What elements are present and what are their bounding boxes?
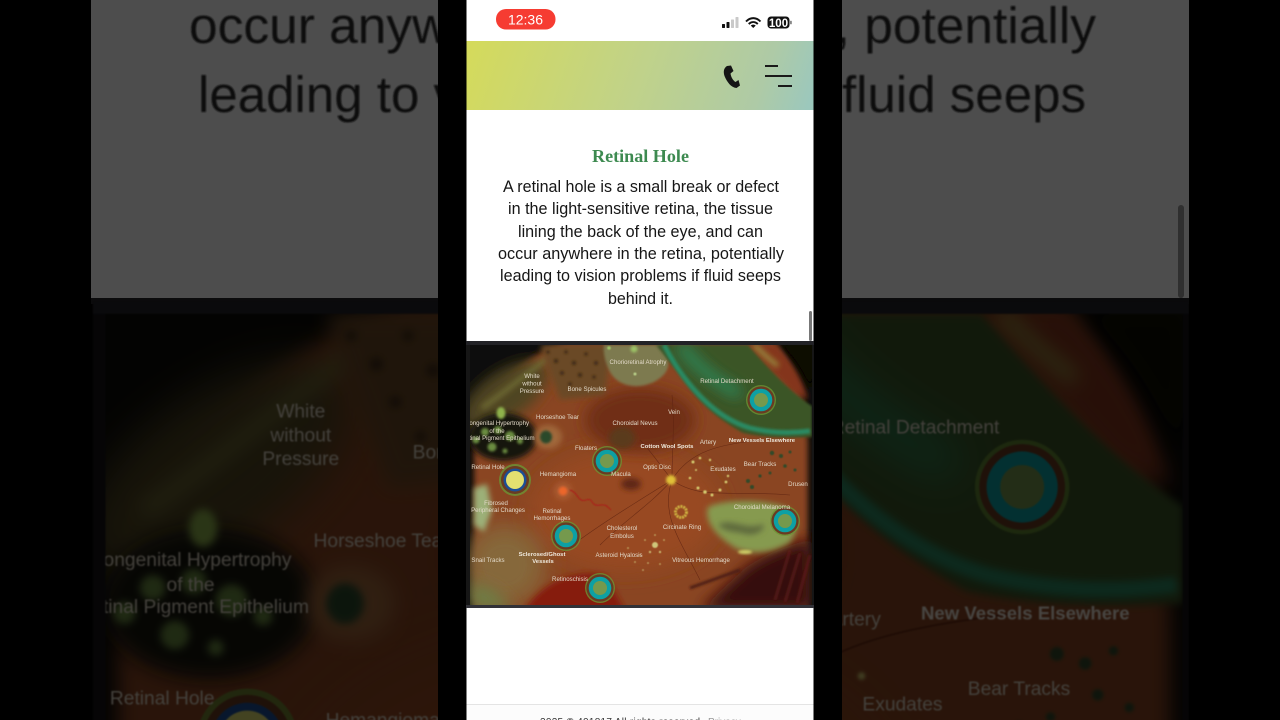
labels: retinal conditions: Macula	[611, 471, 631, 478]
icon: signal bars	[722, 17, 738, 28]
header band	[466, 41, 814, 110]
text block: description: A retinal hole is a small break or defect	[503, 178, 779, 196]
labels: retinal conditions: Peripheral Changes	[471, 507, 525, 514]
labels: retinal conditions: Snail Tracks	[471, 557, 505, 564]
panel: left enlarged backdrop: Pressure	[262, 449, 339, 470]
labels: retinal conditions: Retinal	[543, 508, 561, 515]
labels: retinal conditions: Horseshoe Tear	[536, 414, 579, 421]
labels: retinal conditions: Bone Spicules	[568, 386, 606, 393]
labels: retinal conditions: Retinal Detachment	[700, 378, 754, 385]
icon: menu	[765, 66, 792, 86]
footer	[466, 704, 814, 720]
labels: retinal conditions	[461, 359, 808, 583]
labels: retinal conditions: Artery	[700, 439, 717, 446]
labels: retinal conditions: Bear Tracks	[744, 461, 776, 468]
labels: retinal conditions: Sclerosed/Ghost	[519, 552, 565, 558]
labels: retinal conditions: Hemangioma	[540, 471, 577, 478]
markers: pulsing hotspots	[499, 385, 800, 603]
labels: retinal conditions: Floaters	[575, 445, 597, 452]
labels: retinal conditions: Fibrosed	[484, 500, 508, 507]
text block: description	[498, 178, 785, 308]
labels: retinal conditions: Pressure	[520, 388, 545, 395]
panel: right enlarged backdrop: Exudates	[862, 695, 942, 716]
icon: battery: 100	[769, 18, 788, 30]
labels: retinal conditions: Embolus	[610, 533, 634, 540]
labels: retinal conditions: Retinal Hole	[471, 464, 505, 471]
text block: description: behind it.	[608, 290, 673, 308]
labels: retinal conditions: Congenital Hypertrophy	[465, 420, 530, 427]
labels: retinal conditions: Retinal Pigment Epithelium	[461, 435, 535, 442]
labels: retinal conditions: Cholesterol	[607, 525, 637, 532]
panel: left enlarged backdrop: Retinal Hole	[110, 688, 215, 709]
labels: retinal conditions: White	[524, 373, 540, 380]
text block: description: leading to vision problems if fluid seeps	[500, 267, 781, 285]
labels: retinal conditions: Retinoschisis	[552, 576, 588, 583]
panel: right enlarged backdrop: Bear Tracks	[968, 679, 1070, 700]
text block: description: lining the back of the eye, and can	[518, 223, 763, 241]
labels: retinal conditions: Hemorrhages	[534, 515, 570, 522]
heading: Retinal Hole	[592, 146, 689, 166]
time pill	[496, 9, 556, 30]
panel: right enlarged backdrop	[842, 0, 1189, 720]
labels: retinal conditions: Circinate Ring	[663, 524, 701, 531]
text block: description: occur anywhere in the retina, potentially	[498, 245, 785, 263]
text block: description: in the light-sensitive retina, the tissue	[508, 200, 773, 218]
labels: retinal conditions: Choroidal Melanoma	[734, 504, 791, 511]
labels: retinal conditions: New Vessels Elsewhere	[729, 438, 796, 444]
panel: left enlarged backdrop: Congenital Hypertrophy	[90, 550, 292, 571]
labels: retinal conditions: Cotton Wool Spots	[641, 444, 694, 450]
panel: left enlarged backdrop: of the	[167, 575, 215, 596]
labels: retinal conditions: Optic Disc	[643, 464, 671, 471]
panel: left enlarged backdrop: Horseshoe Tear	[314, 531, 449, 552]
panel: phone screen	[450, 0, 814, 720]
labels: retinal conditions: Choroidal Nevus	[612, 420, 658, 427]
labels: retinal conditions: Vitreous Hemorrhage	[672, 557, 731, 564]
panel: left enlarged backdrop: Bone Spicules	[413, 443, 535, 464]
panel: left enlarged backdrop: without	[269, 425, 332, 446]
panel: left enlarged backdrop	[91, 0, 438, 720]
labels: retinal conditions: Chorioretinal Atrophy	[610, 359, 667, 366]
icon: wifi	[746, 18, 760, 28]
time pill: 12:36	[508, 12, 543, 28]
panel: left enlarged backdrop: White	[276, 402, 325, 423]
labels: retinal conditions: Vein	[668, 409, 680, 416]
panel: right enlarged backdrop: Artery	[830, 610, 881, 631]
scrollbar	[809, 311, 812, 341]
status bar	[496, 9, 792, 30]
panel: left enlarged backdrop: leading to vision problems if fluid seeps	[198, 66, 1086, 123]
panel: right enlarged backdrop: New Vessels Elsewhere	[921, 602, 1130, 623]
labels: retinal conditions: Exudates	[710, 466, 736, 473]
labels: retinal conditions: without	[521, 380, 542, 388]
labels: retinal conditions: Vessels	[532, 559, 555, 565]
panel: right enlarged backdrop: Retinal Detachment	[831, 417, 1000, 438]
labels: retinal conditions: Drusen	[788, 481, 808, 488]
labels: retinal conditions: of the	[489, 428, 505, 435]
panel: left enlarged backdrop: Retinal Pigment Epithelium	[78, 597, 309, 618]
icon: phone	[724, 66, 740, 88]
chart: fundus diagram	[450, 341, 814, 612]
panel: right enlarged backdrop: leading to vision problems if fluid seeps	[198, 66, 1086, 123]
labels: retinal conditions: Asteroid Hyalosis	[595, 552, 643, 559]
